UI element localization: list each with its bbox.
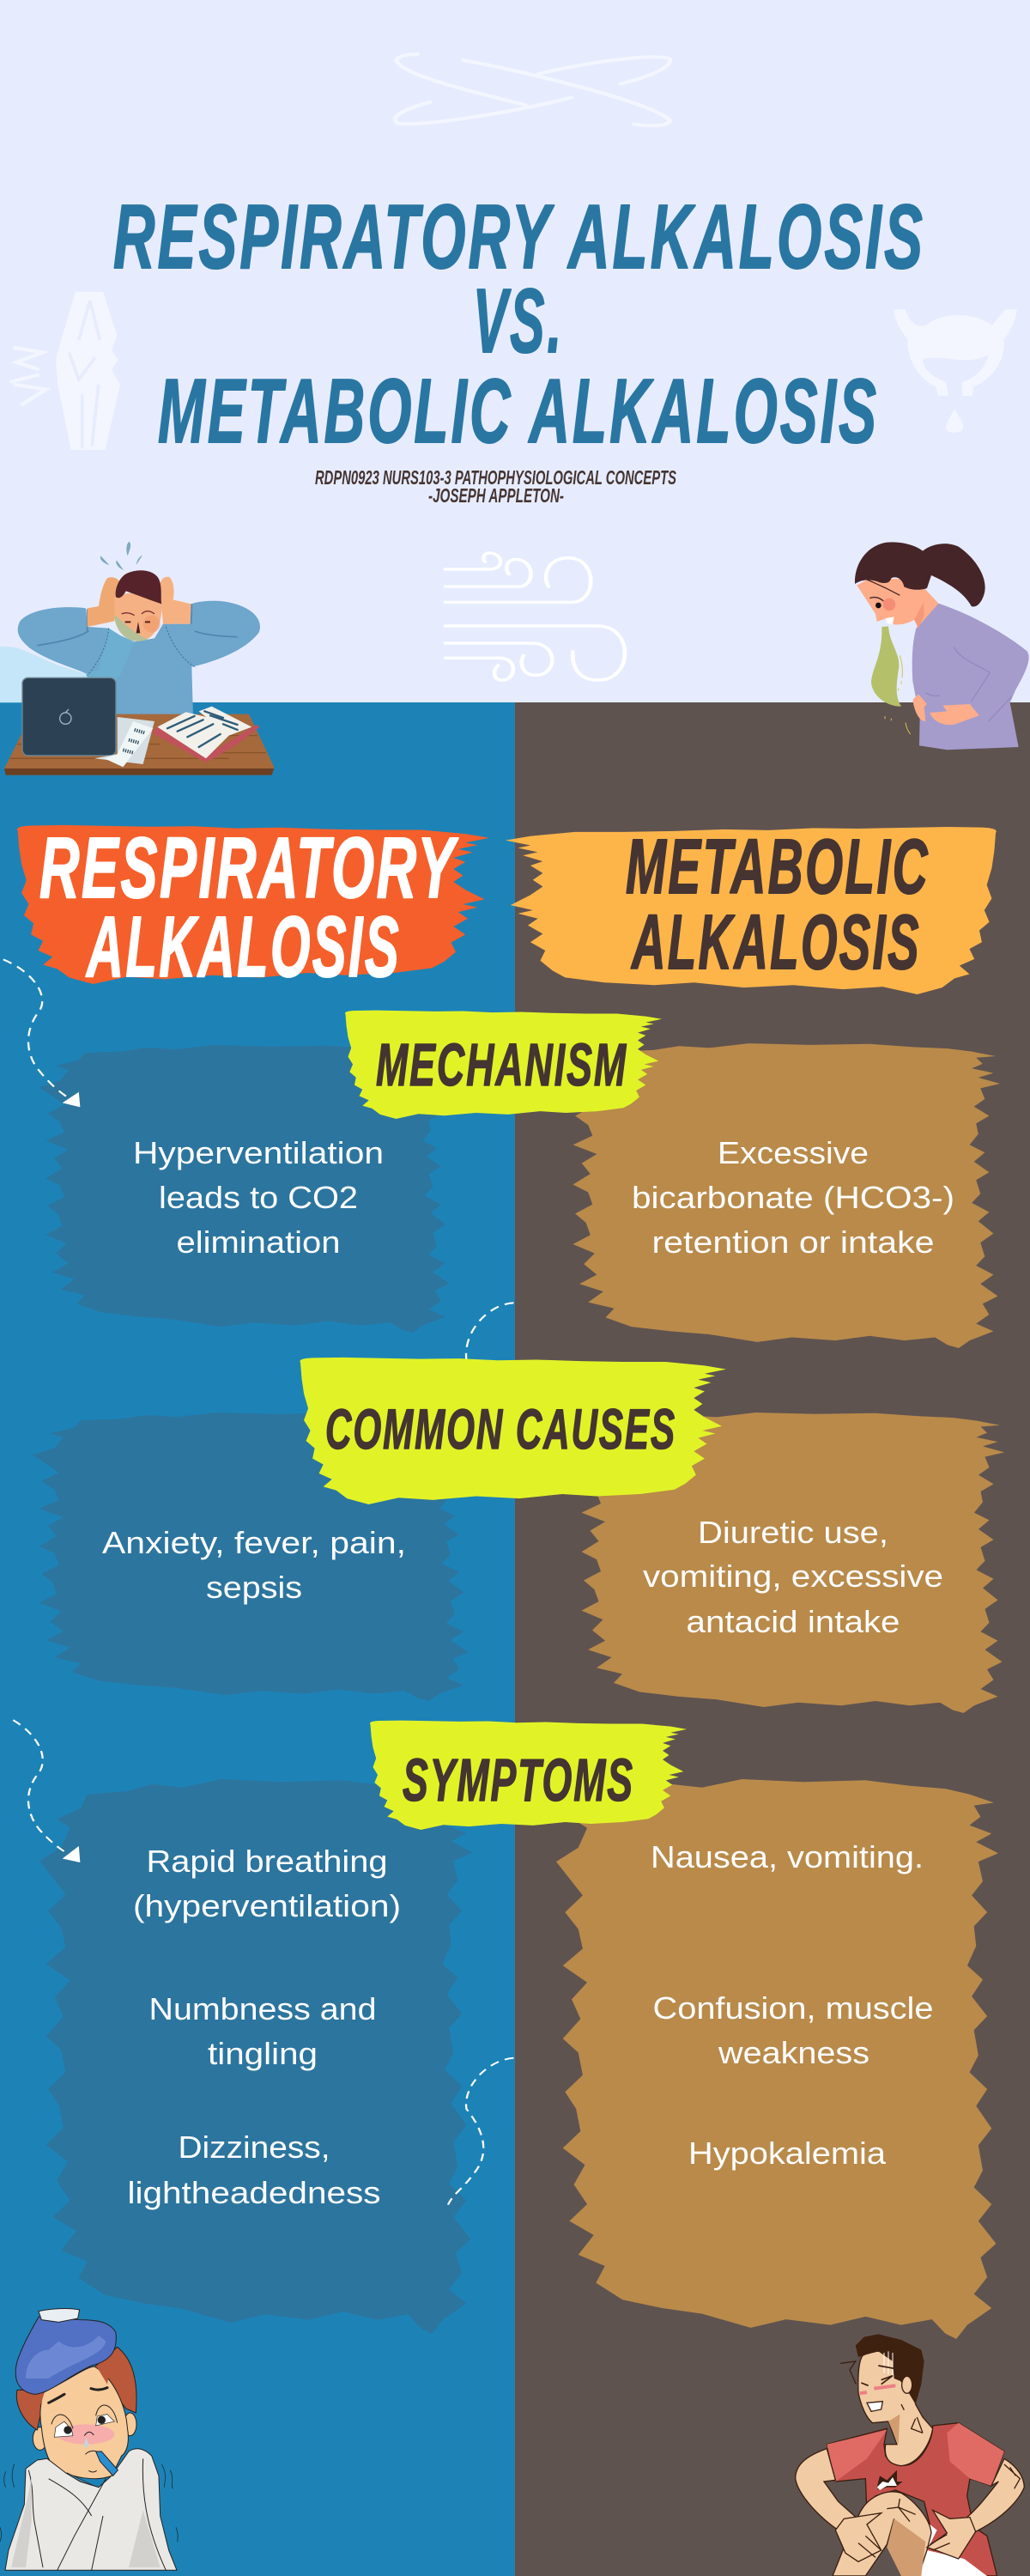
panel: mechanism respiratory: elimination	[177, 1224, 340, 1260]
panel: respiratory heading: RESPIRATORY	[39, 820, 459, 916]
subtitle: course and author: -JOSEPH APPLETON-	[428, 484, 564, 507]
panel: mechanism respiratory	[39, 1045, 451, 1333]
left column background	[0, 702, 515, 2576]
panel: causes metabolic	[575, 1413, 1004, 1713]
illustration: stressed student at desk	[0, 542, 274, 775]
title: VS.	[473, 270, 564, 372]
dashed arrow: lower right connector	[448, 2058, 513, 2205]
dashed arrow: mid connector	[466, 1303, 513, 1360]
panel: causes metabolic: vomiting, excessive	[643, 1558, 943, 1594]
heading: mechanism	[345, 1011, 662, 1119]
subtitle: course and author: RDPN0923 NURS103-3 PATHOPHYSIOLOGICAL CONCEPTS	[315, 466, 676, 489]
heading: common causes	[300, 1358, 726, 1504]
panel: symptoms respiratory: tingling	[208, 2036, 318, 2071]
panel: mechanism metabolic: Excessive	[718, 1135, 869, 1170]
illustration: vomiting woman	[855, 542, 1029, 750]
title	[113, 186, 925, 462]
panel: symptoms respiratory: (hyperventilation)	[133, 1888, 401, 1923]
panel: mechanism respiratory: Hyperventilation	[133, 1135, 384, 1170]
panel: respiratory heading: ALKALOSIS	[85, 899, 401, 995]
icon: faint bladder	[894, 309, 1017, 433]
panel: symptoms respiratory: Dizziness,	[179, 2129, 330, 2165]
heading: symptoms: SYMPTOMS	[403, 1747, 634, 1814]
panel: respiratory heading	[17, 820, 489, 995]
right column background	[515, 702, 1030, 2576]
heading: symptoms	[370, 1721, 687, 1830]
panel: symptoms respiratory: Numbness and	[149, 1991, 376, 2026]
panel: symptoms metabolic: Confusion, muscle	[652, 1990, 934, 2026]
panel: mechanism respiratory: leads to CO2	[159, 1180, 358, 1215]
panel: causes metabolic: Diuretic use,	[698, 1515, 888, 1550]
panel: symptoms respiratory: Rapid breathing	[146, 1844, 388, 1879]
panel: symptoms respiratory	[39, 1779, 473, 2334]
panel: causes respiratory: Anxiety, fever, pain,	[102, 1525, 406, 1560]
panel: symptoms metabolic	[556, 1779, 998, 2339]
icon: wind	[445, 553, 625, 680]
panel: mechanism metabolic: retention or intake	[652, 1224, 934, 1260]
panel: causes respiratory: sepsis	[206, 1570, 302, 1605]
panel: causes metabolic: antacid intake	[687, 1604, 900, 1639]
illustration: sick boy with ice bag and thermometer	[0, 2308, 178, 2570]
panel: symptoms respiratory: lightheadedness	[127, 2175, 381, 2210]
icon: faint leg muscle	[9, 292, 120, 450]
panel: symptoms metabolic: Nausea, vomiting.	[651, 1839, 924, 1874]
panel: symptoms metabolic: weakness	[718, 2035, 869, 2070]
subtitle: course and author	[315, 466, 676, 507]
panel: causes respiratory	[33, 1413, 470, 1701]
illustration: man in pain holding knee	[796, 2334, 1024, 2576]
dashed arrow: top left	[3, 959, 80, 1107]
panel: mechanism metabolic	[566, 1043, 1000, 1348]
heading: common causes: COMMON CAUSES	[325, 1397, 676, 1461]
panel: metabolic heading	[506, 824, 997, 994]
dashed arrow: lower left	[13, 1720, 80, 1862]
icon: faint orbit swirl	[395, 54, 670, 125]
panel: mechanism metabolic: bicarbonate (HCO3-)	[632, 1180, 954, 1215]
heading: mechanism: MECHANISM	[376, 1031, 627, 1098]
panel: symptoms metabolic: Hypokalemia	[688, 2136, 887, 2171]
